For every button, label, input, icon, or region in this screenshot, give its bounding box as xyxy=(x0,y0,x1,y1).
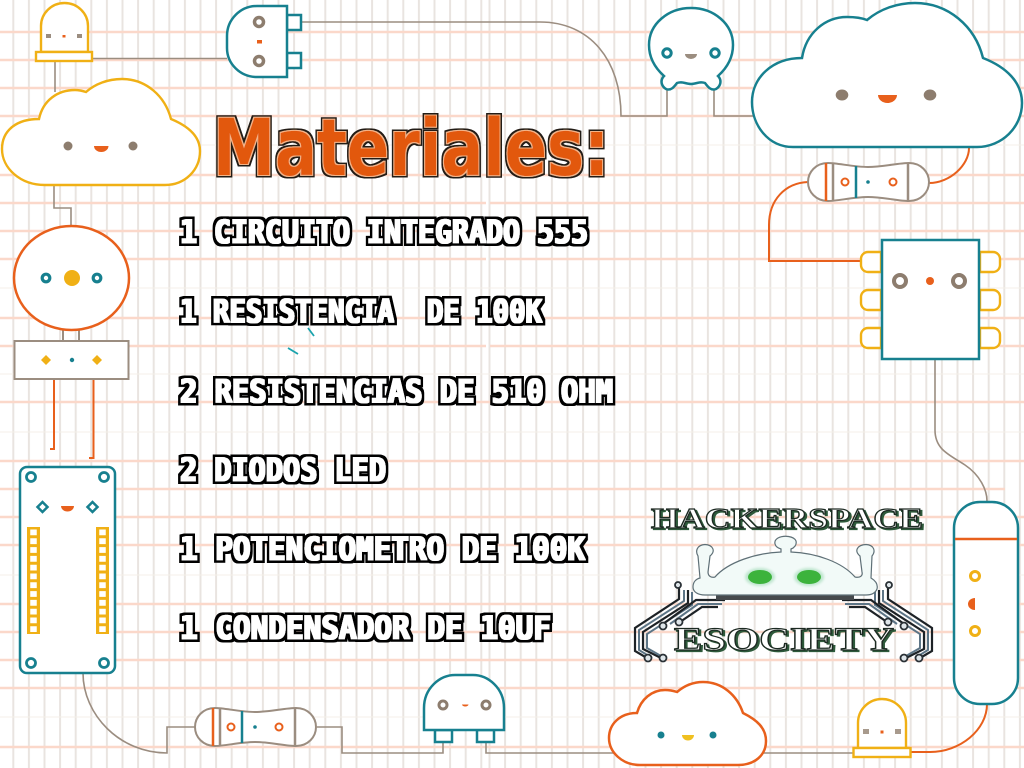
icon: chip right xyxy=(861,240,1000,359)
list item 2: 1 RESISTENCIA DE 100K xyxy=(180,292,543,330)
icon: orange round sensor left xyxy=(14,226,129,458)
list item 6: 1 CONDENSADOR DE 10UF xyxy=(180,609,551,647)
icon: capsule right xyxy=(954,502,1018,704)
wires: orange connections xyxy=(769,148,987,752)
materials list xyxy=(180,213,613,647)
logo circuit traces left xyxy=(635,582,725,662)
list item 4: 2 DIODOS LED xyxy=(180,451,386,489)
list item 3: 2 RESISTENCIAS DE 510 OHM xyxy=(180,372,613,410)
icon: teal round sensor top xyxy=(649,8,733,90)
logo heading: HACKERSPACE xyxy=(651,503,923,535)
logo: Hackerspace Esociety xyxy=(635,503,932,662)
stray teal marks xyxy=(288,328,314,354)
logo circuit traces right xyxy=(842,582,932,662)
icon: resistor bottom xyxy=(195,708,316,746)
list item 5: 1 POTENCIOMETRO DE 100K xyxy=(180,530,586,568)
icon: orange cloud bottom xyxy=(609,682,766,765)
icon: teal board left xyxy=(20,467,115,673)
icon: resistor top right xyxy=(808,163,929,201)
icon: teal cloud top right xyxy=(752,3,1022,147)
title: Materiales: xyxy=(213,104,609,194)
logo robot dome xyxy=(693,536,877,600)
icon: yellow LED top left xyxy=(36,3,92,61)
logo subheading: ESOCIETY xyxy=(674,622,894,658)
icon: teal connector bottom xyxy=(424,675,504,742)
icon: yellow cloud left xyxy=(2,79,200,185)
icon: teal connector top xyxy=(227,6,301,77)
list item 1: 1 CIRCUITO INTEGRADO 555 xyxy=(180,213,588,251)
icon: yellow LED bottom xyxy=(854,699,910,757)
